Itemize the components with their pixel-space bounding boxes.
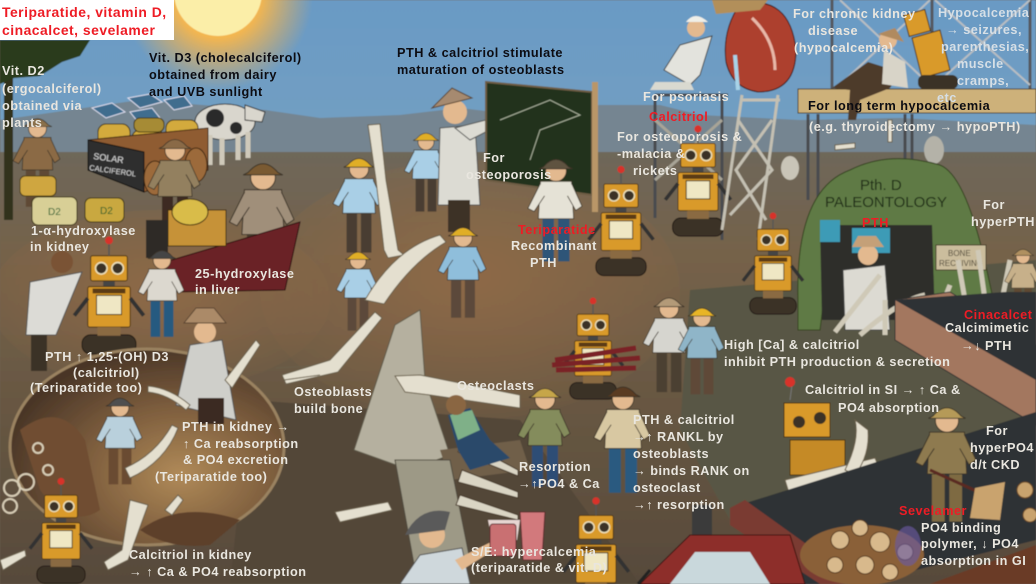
dark lower ground: [230, 400, 640, 584]
D3 batteries on cart: [98, 118, 198, 152]
chalkboard: [486, 82, 598, 212]
label: thyroidectomy: (e.g. thyroidectomy → hypoPTH): [809, 120, 1021, 134]
label: osteoblasts: build bone: [294, 402, 363, 416]
label: calcimimetic: →↓ PTH: [961, 339, 1012, 353]
tower 1: [655, 95, 728, 240]
red truck: [638, 535, 805, 584]
worker osteo builder: [438, 228, 486, 318]
upper conveyor: [895, 292, 1036, 425]
worker in crater: [96, 398, 142, 484]
tower 2: [722, 95, 780, 240]
label: for osteoporosis: osteoporosis: [466, 168, 552, 182]
label: for osteoporosis: For: [483, 151, 505, 165]
kidney: [712, 0, 796, 92]
reclining man: [832, 28, 908, 120]
label: teriparatide: Teriparatide: [518, 223, 596, 237]
D2 batteries: D2: [48, 207, 61, 218]
kneeling osteoblast worker: [333, 159, 383, 253]
D2 batteries: D2: [100, 206, 113, 217]
crouching woman: [446, 395, 510, 470]
label: osteoblast maturation: PTH & calcitriol stimulate: [397, 46, 563, 60]
label: 1-alpha-hydroxylase: 1-α-hydroxylase: [31, 224, 136, 238]
scientist on tower: [650, 16, 712, 90]
label: RANKL pathway: → binds RANK on: [633, 464, 750, 478]
platform: [798, 89, 1036, 113]
solar calciferol cart: CALCIFEROL: [89, 163, 137, 179]
sun: [123, 0, 313, 90]
long bone upright: [368, 124, 404, 258]
wheelbarrow with robot box: [146, 199, 300, 292]
solar panels: [92, 94, 192, 122]
label: PTH in kidney: (Teriparatide too): [155, 470, 267, 484]
upper frame: [832, 0, 1030, 90]
label: PTH in kidney: & PO4 excretion: [183, 453, 289, 467]
label: calcitriol in small intestine: PO4 absorption: [838, 401, 939, 415]
professor: [432, 88, 505, 232]
dinosaur skeleton: [276, 235, 530, 570]
label: resorption: Resorption: [519, 460, 591, 474]
label: resorption: →↑PO4 & Ca: [518, 477, 600, 491]
cow: [195, 104, 265, 165]
robot on tower: [665, 125, 731, 236]
label: Vit. D3: and UVB sunlight: [149, 85, 263, 99]
label: PO4 binding polymer: PO4 binding: [921, 521, 1001, 535]
label: osteoblast maturation: maturation of osteoblasts: [397, 63, 565, 77]
pipe post: [692, 505, 712, 550]
label: RANKL pathway: →↑ resorption: [633, 498, 725, 512]
title: Teriparatide, vitamin D,: [2, 4, 167, 20]
label: PO4 binding polymer: polymer, ↓ PO4: [921, 537, 1019, 551]
label: osteoblasts: Osteoblasts: [294, 385, 372, 399]
label: calcimimetic: Calcimimetic: [945, 321, 1029, 335]
label: for hyperPO4: hyperPO4: [970, 441, 1034, 455]
D2 batteries: [20, 176, 124, 225]
label: long term hypocalcemia: For long term hypocalcemia: [808, 99, 991, 113]
label: PTH inhibition: High [Ca] & calcitriol: [724, 338, 860, 352]
label: chronic kidney disease: (hypocalcemia): [794, 41, 893, 55]
label: RANKL pathway: →↑ RANKL by: [633, 430, 724, 444]
label: hypocalcemia symptoms: → seizures,: [946, 23, 1022, 37]
robot bottom centre: [563, 497, 629, 584]
label: recombinant PTH: Recombinant: [511, 239, 597, 253]
label: Vit. D3: obtained from dairy: [149, 68, 277, 82]
label: PO4 binding polymer: absorption in GI: [921, 554, 1026, 568]
label: hypocalcemia symptoms: parenthesias,: [941, 40, 1029, 54]
label: for hyperPTH: hyperPTH: [971, 215, 1035, 229]
label: 1-alpha-hydroxylase: in kidney: [30, 240, 90, 254]
green-grey field right: [680, 260, 1036, 520]
label: PTH raises calcitriol: (calcitriol): [73, 366, 140, 380]
label: calcitriol uses: For osteoporosis &: [617, 130, 742, 144]
shells left: [3, 443, 53, 513]
lower conveyor: [730, 412, 1036, 584]
label: for hyperPO4: d/t CKD: [970, 458, 1020, 472]
long bone crater: [125, 425, 178, 478]
solar calciferol cart: SOLAR: [93, 151, 125, 165]
robot near ranger: [589, 166, 653, 276]
lower blue worker with big bone: [336, 252, 378, 331]
bone receiving sign: [936, 245, 986, 270]
label: recombinant PTH: PTH: [530, 256, 557, 270]
kid with raised arms: [594, 387, 650, 493]
bone pile on conveyor: [800, 520, 924, 584]
bone pile: [835, 250, 1010, 340]
shovel worker: [916, 408, 1005, 522]
robot bottom left: [30, 478, 92, 583]
man pushing wheelbarrow: [230, 164, 294, 285]
brown dirt patches: [0, 160, 680, 420]
title: cinacalcet, sevelamer: [2, 22, 155, 38]
label: Vit. D2: (ergocalciferol): [2, 82, 102, 96]
bones bottom-left: [0, 495, 183, 570]
label: RANKL pathway: osteoblasts: [633, 447, 709, 461]
label: calcitriol: Calcitriol: [649, 110, 708, 124]
label: PTH in kidney: PTH in kidney →: [182, 420, 290, 434]
label: PTH in kidney: ↑ Ca reabsorption: [183, 437, 299, 451]
coat man and hard hat worker: [643, 298, 724, 394]
robot with bone cart: [784, 377, 880, 496]
sky: [0, 0, 1036, 160]
man at bone pile: [1005, 249, 1036, 316]
solar calciferol cart: [88, 128, 208, 195]
tent: [798, 159, 1000, 330]
woman with tablet: [138, 251, 184, 337]
tent: PALEONTOLOGY: [825, 194, 947, 211]
label: RANKL pathway: PTH & calcitriol: [633, 413, 735, 427]
ranger: [528, 159, 582, 261]
label: PTH inhibition: inhibit PTH production & secretion: [724, 355, 950, 369]
crater kidney: [10, 349, 284, 546]
lower right brown rock: [930, 545, 1036, 584]
label: calcitriol in kidney: → ↑ Ca & PO4 reabsorption: [129, 565, 306, 579]
worker holding bone: [404, 133, 446, 212]
tent scientist: [843, 236, 890, 330]
label: for hyperPO4: For: [986, 424, 1008, 438]
bone receiving sign: BONE: [948, 249, 971, 258]
label: calcitriol uses: rickets: [633, 164, 677, 178]
label: calcitriol in kidney: Calcitriol in kidney: [129, 548, 252, 562]
label: hypocalcemia symptoms: etc: [937, 91, 957, 105]
label: Vit. D3: Vit. D3 (cholecalciferol): [149, 51, 302, 65]
distant mountains: [0, 100, 1036, 190]
label: PTH: PTH: [862, 216, 889, 230]
blond kid: [518, 388, 570, 486]
robot with tools: [552, 298, 640, 399]
label: hypocalcemia symptoms: muscle: [957, 57, 1004, 71]
bones falling and dishes: [781, 120, 944, 180]
label: 25-hydroxylase: in liver: [195, 283, 240, 297]
robot under tent: [743, 212, 803, 314]
bone receiving sign: RECEIVING: [939, 259, 983, 268]
label: hypocalcemia symptoms: cramps,: [957, 74, 1009, 88]
label: RANKL pathway: osteoclast: [633, 481, 701, 495]
label: cinacalcet: Cinacalcet: [964, 308, 1033, 322]
label: Vit. D2: obtained via: [2, 99, 82, 113]
scientist centre with bones: [148, 308, 260, 424]
label: calcitriol in small intestine: Calcitriol in SI → ↑ Ca &: [805, 383, 961, 397]
label: calcitriol uses: -malacia &: [617, 147, 685, 161]
label: osteoclasts: Osteoclasts: [457, 379, 534, 393]
calci yum cups: [488, 512, 545, 560]
label: for hyperPTH: For: [983, 198, 1005, 212]
robot kidney: [74, 237, 144, 354]
tree: [0, 40, 90, 220]
robot on platform: [904, 10, 958, 89]
label: for psoriasis: For psoriasis: [643, 90, 729, 104]
ground: [0, 152, 1036, 584]
title box: [0, 0, 174, 40]
label: Vit. D2: Vit. D2: [2, 64, 45, 78]
TA man bottom: [400, 511, 497, 584]
label: sevelamer: Sevelamer: [899, 504, 967, 518]
label: side effect: (teriparatide & vit. D): [471, 561, 607, 575]
tent: Pth. D: [860, 177, 902, 194]
right bones: [1017, 482, 1036, 522]
label: PTH raises calcitriol: (Teriparatide too): [30, 381, 142, 395]
purple watermark: [895, 526, 921, 566]
scientist white coat left: [26, 251, 82, 371]
worker with D2 battery: [13, 119, 60, 207]
label: hypocalcemia symptoms: Hypocalcemia: [938, 6, 1029, 20]
label: PTH raises calcitriol: PTH ↑ 1,25-(OH) D3: [45, 350, 169, 364]
label: side effect: S/E: hypercalcemia: [471, 545, 596, 559]
label: 25-hydroxylase: 25-hydroxylase: [195, 267, 294, 281]
label: chronic kidney disease: For chronic kidney: [793, 7, 916, 21]
label: Vit. D2: plants: [2, 116, 42, 130]
label: chronic kidney disease: disease: [808, 24, 858, 38]
boy with panel: [148, 140, 200, 238]
